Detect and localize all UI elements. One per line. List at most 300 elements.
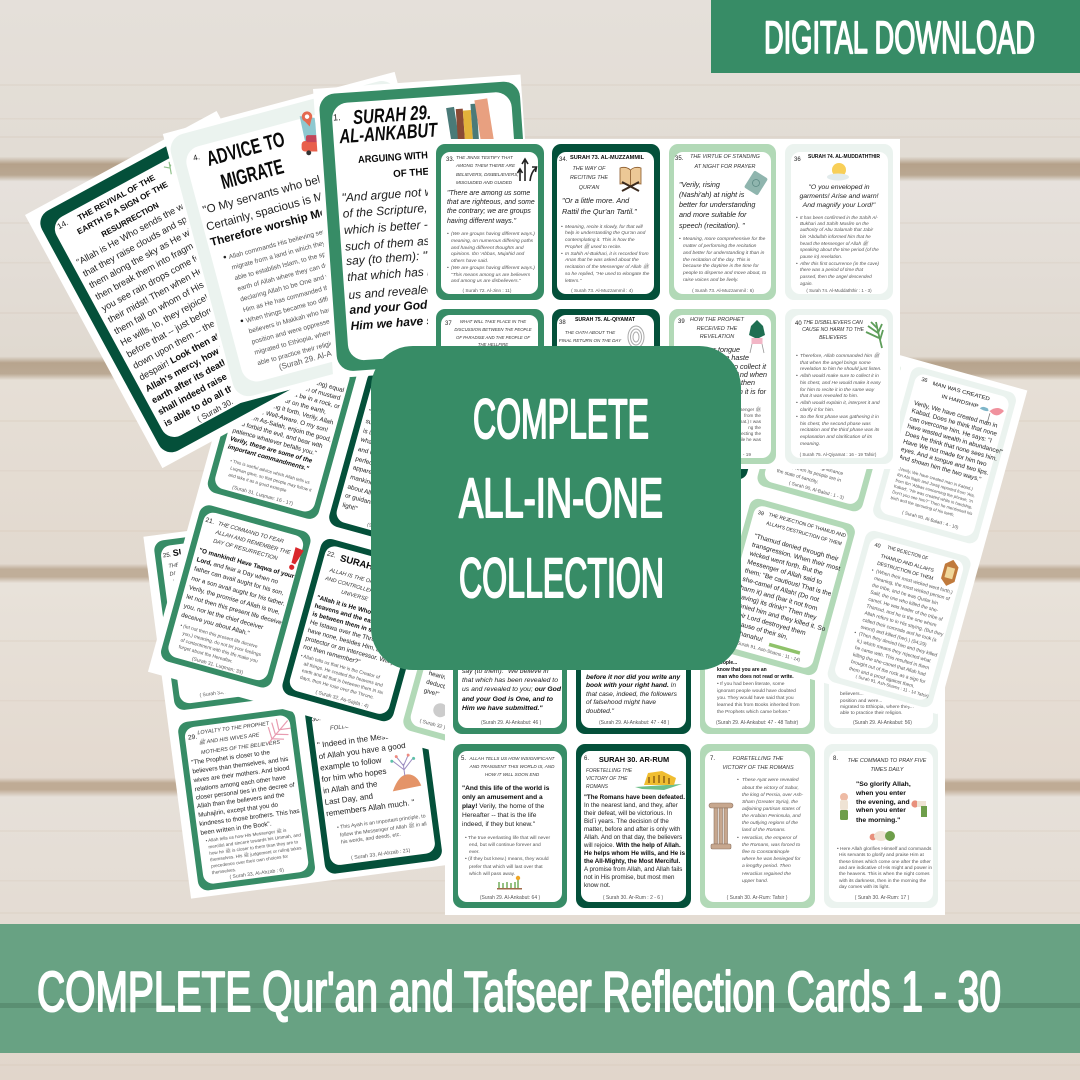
- card 38: Surah 75 Al-Qiyamat: THE OATH ABOUT THE: [565, 330, 616, 335]
- card 30: following the Messenger: in Allah and the: [323, 779, 379, 795]
- card: migrating believers: believers...: [840, 691, 864, 697]
- card 40: the disbelievers can cause no harm: •: [796, 415, 798, 420]
- card 21: the command to fear Allah: 21.: [205, 517, 215, 526]
- card 40: the rejection of Thamud Tafsir: camel. He was leader of the tribe of: [868, 596, 944, 623]
- card 36: man was created in hardship: Verily, We have created man in: [913, 400, 999, 430]
- card 30: following the Messenger: for him who hopes: [321, 767, 387, 784]
- card 7: foretelling the victory: Heraclius, the emperor of: [742, 835, 798, 841]
- card 33: the Jinns testify: meaning, on numerous differing paths: [451, 238, 534, 244]
- card 8: the command to pray: when you enter: [855, 790, 906, 797]
- card 36: Surah 74 Al-Muddaththir: garments! Arise and warn!: [799, 193, 879, 200]
- card 22: Surah 32: days, then He rose over the Throne.: [299, 675, 375, 701]
- card: dark lower: [594, 465, 741, 645]
- card 1: Surah 29 Al-Ankabut: [313, 74, 541, 378]
- card 40: the rejection of Thamud Tafsir: 40: [874, 542, 881, 550]
- card 30: following the Messenger: example to follow: [320, 756, 382, 773]
- card 40: the rejection of Thamud Tafsir: [826, 529, 973, 709]
- card: light green lower: [401, 570, 556, 759]
- card 14: the revival of the earth: EARTH IS A SIGN OF THE: [76, 180, 170, 236]
- card 20: Luqman advice: Allah will bring it forth. Verily, Allah: [241, 394, 335, 427]
- card 37: discussion between paradise and hellfire: WHAT WILL TAKE PLACE IN THE: [460, 319, 526, 324]
- card 35: Al-Balad: the state of sanctity.: [776, 468, 819, 485]
- card 40: the disbelievers can cause no harm: clarify it for him.: [800, 407, 834, 413]
- card 40: the disbelievers can cause no harm: explanation and clarification of its: [800, 434, 873, 440]
- icon: open Quran on stand: [620, 167, 641, 191]
- card 6: Surah 30 Ar-Rum: VICTORY OF THE: [586, 776, 628, 782]
- card 14: the revival of the earth: THE REVIVAL OF THE: [76, 173, 157, 223]
- card 8: the command to pray: "So glorify Allah,: [856, 781, 911, 788]
- card 40: the rejection of Thamud Tafsir: ( Surah 91. Ash-Shams : 11 - 14 Tafsir): [855, 674, 930, 699]
- card: dark upper: [640, 301, 787, 481]
- card 35: Al-Balad: sanctity when the significance: [780, 454, 844, 477]
- card 14: the revival of the earth: their midst! Then when He has made: [106, 245, 243, 325]
- card 33: the Jinns testify: ( Surah 72. Al-Jinn : 11): [463, 288, 512, 293]
- card 21: the command to fear Allah: THE COMMAND TO FEAR: [217, 521, 284, 545]
- card 40: the rejection of Thamud Tafsir: Salif, the one who killed the she-: [869, 590, 939, 614]
- card 21: the command to fear Allah: (Surah 31. Luqman: 33): [191, 656, 244, 676]
- card 36: man was created in hardship: can overcome him. He says: "I: [909, 415, 993, 445]
- card 20: Luqman advice: Luqman gave, so that people may follow it: [230, 465, 313, 493]
- card 4: advice to migrate: When things became too difficult for the: [245, 288, 359, 325]
- card 22: Surah 32: not then remember?": [302, 643, 361, 666]
- card 33: the Jinns testify: (We are groups having different ways.): [451, 265, 535, 271]
- card 33: the Jinns testify: opinions. Ibn 'Abbas, Mujahid and: [451, 251, 525, 257]
- sheet: cards 21, 22 and Luqman: [148, 318, 631, 779]
- card 36: Surah 74 Al-Muddaththir: 36: [794, 157, 801, 163]
- card 7: foretelling the victory: about the victory of Sabur,: [742, 785, 799, 791]
- card 40: the rejection of Thamud Tafsir: (Then they denied him and they killed: [858, 631, 938, 659]
- card 30: following the Messenger: 30.: [311, 715, 321, 723]
- card: dark green upper: (Surah 31. Luqman: 20): [366, 522, 419, 542]
- card 21: the command to fear Allah: [159, 503, 313, 690]
- card 20: Luqman advice: in the heavens or on the earth,: [243, 386, 327, 416]
- card 35: virtue of standing at night: •: [679, 237, 681, 242]
- card 33: the Jinns testify: THE JINNS TESTIFY THAT: [456, 155, 514, 160]
- card 40: the disbelievers can cause no harm: recitation and the third phase was its: [800, 427, 880, 433]
- card 36: man was created in hardship: [871, 365, 1019, 546]
- card 40: the rejection of Thamud Tafsir: sword) and killed (her).) (54:29): [860, 624, 928, 648]
- card 38: Surah 75 Al-Qiyamat: [552, 309, 660, 464]
- card 22: Surah 32: heavens and the earth and all that: [314, 602, 414, 637]
- card 40: the disbelievers can cause no harm: So the first phase was gathering it in: [800, 414, 879, 420]
- card 40: the rejection of Thamud Tafsir: Thamud, and he is the one whom: [866, 603, 937, 629]
- card: dark green upper: light!": [342, 502, 358, 513]
- card 20: Luqman advice: patience whatever befalls you.": [232, 427, 317, 457]
- card: dark green upper: is in the heavens and: [362, 428, 422, 450]
- card 6: Surah 30 Ar-Rum: SURAH 30. AR-RUM: [599, 755, 669, 764]
- card 40: the disbelievers can cause no harm: his chest, and He would make it easy: [800, 380, 881, 386]
- icon: green leaf: [866, 322, 883, 348]
- card 35: Al-Balad: is high, when its people are in: [778, 461, 842, 484]
- card 4: advice to migrate: declaring Allah to be One and worshipping: [240, 265, 361, 303]
- card 29: loyalty to the Prophet: Muhajirin, except that you do: [198, 801, 279, 819]
- card 7: foretelling the victory: adjoining partisan states of: [742, 806, 801, 812]
- card 21: the command to fear Allah: "O mankind! Have Taqwa of your: [198, 547, 295, 580]
- card 6: Surah 30 Ar-Rum: their defeat, will be victorious. In: [584, 810, 673, 817]
- card 14: the revival of the earth: before that -- just before it was sent: [125, 282, 257, 359]
- card 36: man was created in hardship: Don't you see him?" Then he mentioned his: [892, 489, 973, 516]
- card 1: Surah 29 Al-Ankabut: OF THE: [393, 167, 430, 180]
- card 29: loyalty to the Prophet: merciful and sincere towards his Ummah, and: [208, 832, 302, 849]
- card 39: rejection of Thamud: Messenger of Allah said to: [746, 559, 823, 586]
- card 22: Surah 32: all things. He created the heavens and: [303, 661, 384, 689]
- card 21: the command to fear Allah: • (let not then this present life deceive: [180, 623, 258, 650]
- card 30: following the Messenger: his words, and deeds, etc.: [341, 832, 401, 846]
- card 37: discussion between paradise and hellfire: THE HELLFIRE: [478, 342, 508, 347]
- card: Tafsir of 47 - 48: the Prophets which came before.": [717, 709, 790, 715]
- card 33: the Jinns testify: "There are among us some: [447, 190, 530, 197]
- card 1: Surah 29 Al-Ankabut: such of them as do wrong; and: [345, 228, 510, 254]
- card 4: advice to migrate: position and were oppressed, they: [251, 313, 350, 346]
- card 33: the Jinns testify: others have said.: [451, 258, 488, 264]
- card: Tafsir of 47 - 48: people...: [717, 660, 738, 666]
- icon: red exclamation mark: [287, 547, 304, 571]
- icon: flamingo: [977, 403, 1004, 426]
- card 40: the disbelievers can cause no harm: •: [796, 401, 798, 406]
- card 35: virtue of standing at night: because the daytime is the time for: [683, 263, 759, 269]
- card 21: the command to fear Allah: you, nor let the chief deceiver: [183, 603, 264, 631]
- card 36: man was created in hardship: have wasted wealth in abundance!": [906, 423, 1004, 456]
- card 35: virtue of standing at night: THE VIRTUE OF STANDING: [690, 154, 760, 160]
- card 30: following the Messenger: Last Day, and: [324, 792, 374, 807]
- card 6: Surah 30 Ar-Rum: ( Surah 30. Ar-Rum : 2 - 6 ): [603, 895, 663, 901]
- card 14: the revival of the earth: them along the sky as He wills, and: [87, 213, 219, 290]
- card: argue with scripture ending: say (to them): "We believe in: [462, 668, 549, 675]
- card 4: advice to migrate: migrate from a land in which they are not: [231, 234, 348, 272]
- card 40: the rejection of Thamud Tafsir: meaning, the most wicked person of: [873, 576, 951, 603]
- card 40: the rejection of Thamud Tafsir: killing the she-camel that Allah had: [852, 652, 927, 678]
- card 22: Surah 32: He Istawa over the Throne. You: [309, 619, 396, 649]
- card: neither did you read: [576, 570, 691, 734]
- card 40: the disbelievers can cause no harm: [785, 309, 893, 464]
- card 14: the revival of the earth: RESURRECTION: [100, 201, 161, 239]
- card 8: the command to pray: the heavens. This is when the night comes: [839, 871, 930, 877]
- card: Tafsir of 47 - 48: you. They would have said that you: [717, 695, 794, 701]
- card 25: [153, 526, 292, 711]
- card 39: rejection of Thamud: transgression. When their most: [751, 542, 841, 573]
- card: neither did you read: that case, indeed, the followers: [586, 691, 678, 698]
- card 6: Surah 30 Ar-Rum: He helps whom He wills, and He is: [584, 850, 686, 857]
- card 34: Surah 73 Al-Muzzammil: help in understanding the Qur'an and: [565, 230, 646, 236]
- card 1: Surah 29 Al-Ankabut: SURAH 29.: [352, 102, 432, 129]
- card: Tafsir of 47 - 48: [700, 570, 815, 734]
- card 36: Surah 74 Al-Muddaththir: •: [796, 261, 798, 266]
- card 35: virtue of standing at night: matter of performing the recitation: [683, 243, 757, 249]
- card: Tafsir of 47 - 48: learned this from Books inherited from: [717, 702, 800, 708]
- card 22: Surah 32: • Allah tells us that He is the Creator of: [300, 653, 381, 681]
- card 5: Allah tells us how insignificant: ever.: [469, 849, 480, 855]
- card 4: advice to migrate: ADVICE TO: [204, 128, 287, 171]
- card 6: Surah 30 Ar-Rum: [576, 744, 691, 908]
- card 34: Surah 73 Al-Muzzammil: THE WAY OF: [573, 166, 606, 172]
- card 22: Surah 32: SURAH 32. AS-SAJDA: [339, 553, 439, 591]
- icon: sun and cloud: [827, 163, 849, 180]
- card 30: following the Messenger: • This Ayah is an important principle, to: [337, 813, 426, 831]
- card 22: Surah 32: have none, besides Him, as a: [307, 627, 389, 656]
- card 5: Allah tells us how insignificant: • The true everlasting life that will never: [465, 835, 550, 841]
- card 30: following the Messenger: FOLLOW THE MESSENGER: [330, 716, 409, 732]
- card: migrating believers: (Surah 29. Al-Ankabut: 56): [853, 720, 912, 726]
- card 35: virtue of standing at night: raise voices and be lively.: [683, 277, 738, 283]
- card 5: Allah tells us how insignificant: • (if they but knew.) means, they would: [465, 856, 549, 862]
- card: dark green upper: and has completed His Graces: [357, 446, 442, 476]
- card 7: foretelling the victory: •: [737, 778, 739, 783]
- card 1: Surah 29 Al-Ankabut: that which has been revealed to: [347, 258, 517, 284]
- card 35: virtue of standing at night: the recitation of the day. This is: [683, 257, 751, 263]
- card 7: foretelling the victory: the king of Persia, over Ash-: [742, 792, 804, 798]
- card 34: Surah 73 Al-Muzzammil: [552, 144, 660, 300]
- card 40: the rejection of Thamud Tafsir: Allah refers to in His saying, (But they: [864, 610, 944, 638]
- card 34: Surah 73 Al-Muzzammil: recitation of the Messenger of Allah ﷺ: [565, 262, 650, 270]
- card 33: the Jinns testify: [436, 144, 544, 300]
- icon: stone pillar: [709, 803, 733, 849]
- card 40: the rejection of Thamud Tafsir: DESTRUCTION OF THEM: [876, 561, 934, 582]
- card 40: the rejection of Thamud Tafsir: THE REJECTION OF: [886, 545, 928, 562]
- card 29: loyalty to the Prophet: [177, 708, 316, 892]
- card: Tafsir of 47 - 48: (Surah 29. Al-Ankabut: 47 - 48 Tafsir): [716, 720, 799, 726]
- card 38: Surah 75 Al-Qiyamat: SURAH 75. AL-QIYAMAT: [575, 317, 636, 323]
- card 1: Surah 29 Al-Ankabut: 1.: [333, 112, 341, 123]
- card 34: Surah 73 Al-Muzzammil: QUR'AN: [579, 185, 599, 191]
- card 39: how the Prophet received the revelation: therewith. It is for Us to collect it: [665, 362, 767, 371]
- card 7: foretelling the victory: the Romans, was forced to: [742, 842, 800, 848]
- card 34: Surah 73 Al-Muzzammil: In Sahih Al-Bukhari, it is recorded from: [565, 251, 649, 257]
- card 5: Allah tells us how insignificant: "And this life of the world is: [462, 785, 550, 792]
- card 40: the disbelievers can cause no harm: that it was revealed to him.: [800, 393, 858, 399]
- card 30: following the Messenger: [304, 691, 443, 875]
- card 37: discussion between paradise and hellfire: DISCUSSION BETWEEN THE PEOPLE: [454, 327, 532, 332]
- card 40: the disbelievers can cause no harm: •: [796, 374, 798, 379]
- card 6: Surah 30 Ar-Rum: In the nearest land, and they, after: [584, 802, 678, 809]
- card 1: Surah 29 Al-Ankabut: and your God is One, and to: [349, 292, 510, 317]
- card 7: foretelling the victory: Heraclius regained the: [742, 871, 791, 877]
- card 7: foretelling the victory: These Ayat were revealed: [742, 777, 799, 783]
- card 1: Surah 29 Al-Ankabut: say (to them): "We believe in: [346, 243, 499, 268]
- sheet: rotated page with cards 36, 39 and 40: [468, 260, 1027, 714]
- card 36: Surah 74 Al-Muddaththir: heard the Messenger of Allah ﷺ: [800, 240, 869, 246]
- card 8: the command to pray: [824, 744, 938, 908]
- card 8: the command to pray: 8.: [833, 756, 838, 762]
- card 8: the command to pray: with its darkness, then in the morning the: [839, 878, 927, 884]
- card 4: advice to migrate: [163, 72, 467, 404]
- card: neither did you read: book with your right hand. In: [586, 682, 676, 689]
- heading: complete: COMPLETE: [473, 387, 649, 450]
- icon: car with map pin: [292, 108, 333, 161]
- card 20: Luqman advice: seed, and though it be in a rock, or: [245, 378, 340, 411]
- card: light green lower: hearing and: [428, 670, 462, 686]
- card: argue with scripture ending: (Surah 29. Al-Ankabut: 46 ): [481, 720, 542, 726]
- card 39: rejection of Thamud: THE REJECTION OF THAMUD AND: [768, 512, 847, 539]
- icon: potted plant: [749, 320, 765, 353]
- card 8: the command to pray: ( Surah 30. Ar-Rum: 17 ): [855, 895, 910, 901]
- card 30: following the Messenger: ( Surah 33, Al-Ahzab : 21): [351, 848, 411, 861]
- card 36: man was created in hardship: Ibn Abi Najih and Juraij reported from 'Ata,: [897, 472, 976, 498]
- card 36: man was created in hardship: (Verily, We have created man in Kabad.): [898, 466, 974, 492]
- card 4: advice to migrate: Therefore worship Me.": [209, 204, 336, 249]
- card 29: loyalty to the Prophet: Allah than the believers and the: [197, 792, 285, 810]
- card: migrating believers: able to practice their religion.: [840, 710, 903, 716]
- card 34: Surah 73 Al-Muzzammil: 34.: [559, 157, 568, 163]
- card 39: how the Prophet received the revelation: We have recited it to you, then: [658, 378, 755, 387]
- card 22: Surah 32: protector or an intercessor. Will you: [305, 635, 402, 668]
- card 35: virtue of standing at night: "Verily, rising: [679, 180, 720, 189]
- card 36: man was created in hardship: Kabad. Does he think that none: [911, 407, 998, 438]
- card 36: man was created in hardship: 36: [921, 377, 928, 384]
- card 40: the disbelievers can cause no harm: Allah would explain it, interpret it and: [799, 400, 880, 406]
- card 38: Surah 75 Al-Qiyamat: FINAL RETURN ON THE DAY: [559, 338, 622, 343]
- card 34: Surah 73 Al-Muzzammil: so he replied, "He used to elongate the: [565, 271, 650, 277]
- card 22: Surah 32: [280, 537, 442, 726]
- card 29: loyalty to the Prophet: MOTHERS OF THE BELIEVERS: [201, 740, 281, 756]
- card 7: foretelling the victory: a lengthy period. Then: [742, 863, 791, 869]
- card 40: the rejection of Thamud Tafsir: •: [853, 631, 857, 636]
- card 40: the rejection of Thamud Tafsir: it,) which means they rejected what: [856, 638, 932, 664]
- card 21: the command to fear Allah: ALLAH AND REMEMBER THE: [214, 530, 291, 556]
- card 36: man was created in hardship: Have We not made for him two: [902, 438, 988, 468]
- card 36: man was created in hardship: from Ibn 'Abbas concerning the phrase, 'in: [895, 478, 974, 504]
- card 4: advice to migrate: "O My servants who believe!: [202, 168, 345, 217]
- card 40: the rejection of Thamud Tafsir: called their comrade and he took (a: [862, 617, 938, 644]
- card 29: loyalty to the Prophet: wives are their mothers. And blood: [192, 765, 290, 784]
- card 1: Surah 29 Al-Ankabut: us and revealed to you; our God: [348, 276, 520, 302]
- card 29: loyalty to the Prophet: precedence over their own choices for: [211, 854, 289, 869]
- card 40: the rejection of Thamud Tafsir: •: [871, 568, 874, 574]
- card 33: the Jinns testify: •: [447, 266, 449, 271]
- card: light green lower: give!": [423, 687, 440, 698]
- card 39: how the Prophet received the revelation: [627, 309, 776, 464]
- card 5: Allah tells us how insignificant: play! Verily, the home of the: [462, 803, 544, 810]
- card 5: Allah tells us how insignificant: HOW IT WILL SOON END: [485, 772, 540, 777]
- card 5: Allah tells us how insignificant: only an amusement and a: [462, 794, 543, 801]
- card: dark green upper: whatsoever is in the earth,: [359, 436, 433, 463]
- card 33: the Jinns testify: "This means among us are believers: [451, 272, 531, 278]
- card 14: the revival of the earth: 14.: [56, 218, 70, 231]
- card 6: Surah 30 Ar-Rum: 6.: [584, 756, 589, 762]
- card 36: Surah 74 Al-Muddaththir: again.: [800, 281, 813, 286]
- card 35: virtue of standing at night: and more suitable for: [679, 210, 747, 219]
- card 20: Luqman advice: "O my son! If it be (anything) equal: [250, 362, 345, 394]
- card 6: Surah 30 Ar-Rum: matter, before and after is only with: [584, 826, 681, 833]
- card: migrating believers: migrated to Ethiopia, where they...: [840, 704, 914, 710]
- card 36: man was created in hardship: MAN WAS CREATED: [932, 381, 991, 403]
- card 35: Al-Balad: ( Surah 90, Al-Balad : 1 - 3): [788, 480, 845, 500]
- card 35: Al-Balad: [755, 333, 902, 513]
- card 33: the Jinns testify: 33.: [446, 157, 455, 163]
- card 7: foretelling the victory: the Arabian Peninsula, and: [742, 813, 801, 819]
- card 22: Surah 32: 22.: [326, 550, 337, 560]
- card 40: the rejection of Thamud Tafsir: he came with. This resulted in them: [854, 645, 930, 671]
- card 36: Surah 74 Al-Muddaththir: •: [796, 215, 798, 220]
- card 6: Surah 30 Ar-Rum: not in His promise, but most men: [584, 874, 675, 881]
- card 6: Surah 30 Ar-Rum: Allah. And on that day, the believers: [584, 834, 682, 841]
- card 22: Surah 32: ALLAH IS THE ORGANIZER: [328, 567, 397, 592]
- card 5: Allah tells us how insignificant: ALLAH TELLS US HOW INSIGNIFICANT: [468, 756, 556, 761]
- card 5: Allah tells us how insignificant: AND TRANSIENT THIS WORLD IS, AND: [469, 764, 555, 769]
- card 25: THE: [168, 562, 180, 570]
- card 20: Luqman advice: and forbid the evil, and bear with: [234, 419, 324, 450]
- card 14: the revival of the earth: then break them into fragments, until: [94, 222, 229, 302]
- card 14: the revival of the earth: shall indeed raise the dead, and He: [156, 335, 295, 417]
- card 39: rejection of Thamud: [710, 497, 857, 677]
- card 40: the disbelievers can cause no harm: CAUSE NO HARM TO THE: [802, 327, 865, 333]
- card: dark green upper: mankind is he who disputes: [349, 474, 426, 501]
- panel: complete all-in-one collection: [371, 346, 741, 670]
- card 6: Surah 30 Ar-Rum: will rejoice. With the help of Allah.: [584, 842, 681, 849]
- card 4: advice to migrate: Certainly, spacious is My earth.: [205, 181, 362, 234]
- heading: all-in-one: ALL-IN-ONE: [459, 466, 663, 529]
- card 40: the disbelievers can cause no harm: 40: [795, 321, 802, 327]
- card 1: Surah 29 Al-Ankabut: which is better -- except with: [343, 213, 496, 237]
- card 36: Surah 74 Al-Muddaththir: authority of Abu Salamah that Jabir: [800, 227, 873, 232]
- card 35: virtue of standing at night: speech (recitation). ": [679, 221, 745, 230]
- card 7: foretelling the victory: FORETELLING THE: [733, 756, 784, 762]
- card 14: the revival of the earth: despair! Look then at the effects of: [137, 302, 274, 382]
- card 25: SURAH: [172, 544, 205, 558]
- card 36: man was created in hardship: birth and the sprouting of his teeth.: [890, 495, 955, 517]
- card 29: loyalty to the Prophet: 29.: [188, 734, 198, 742]
- card 40: the rejection of Thamud Tafsir: the tribe, and he was Qudar bin: [871, 583, 939, 607]
- icon: teal book: [744, 170, 768, 196]
- card 40: the rejection of Thamud Tafsir: THAMUD AND ALLAH'S: [880, 553, 935, 574]
- card: dark green upper: perfectly upon you,: [354, 456, 408, 477]
- icon: arrows pointing up: [518, 159, 536, 181]
- card 40: the rejection of Thamud Tafsir: (When their most wicked went forth,): [875, 569, 954, 596]
- card 39: how the Prophet received the revelation: REVELATION: [700, 334, 734, 340]
- card 4: advice to migrate: migrated to Ethiopia, where they were: [254, 321, 363, 357]
- card 40: the rejection of Thamud Tafsir: them and a proof against them.: [848, 666, 915, 690]
- card 14: the revival of the earth: is able to do all things.: [162, 372, 254, 428]
- card 40: the disbelievers can cause no harm: that when the angel brings some: [800, 360, 871, 366]
- card: Tafsir of 47 - 48: ignorant people would have doubted: [717, 688, 796, 694]
- card 39: how the Prophet received the revelation: RECEIVED THE: [697, 326, 738, 332]
- card: argue with scripture ending: that which has been revealed to: [462, 677, 558, 684]
- card 36: man was created in hardship: ( Surah 90. Al-Balad : 4 - 10): [902, 510, 960, 530]
- card: argue with scripture ending: Him we have submitted.": [462, 705, 543, 712]
- card 1: Surah 29 Al-Ankabut: Him we have submitted.": [350, 309, 493, 333]
- card 14: the revival of the earth: you see rain drops come forth from: [100, 236, 230, 313]
- card 25: FC: [172, 578, 180, 585]
- card 36: Surah 74 Al-Muddaththir: "O you enveloped in: [809, 184, 870, 191]
- card 25: DIS: [169, 570, 179, 578]
- card 6: Surah 30 Ar-Rum: A promise from Allah, and Allah fails: [584, 866, 682, 873]
- card 5: Allah tells us how insignificant: Hereafter -- that is the life: [462, 812, 537, 819]
- card 34: Surah 73 Al-Muzzammil: RECITING THE: [570, 175, 608, 181]
- card 39: rejection of Thamud: their Lord destroyed them: [732, 610, 807, 637]
- card 21: the command to fear Allah: Lord, and fear a Day when no: [196, 556, 279, 586]
- card 34: Surah 73 Al-Muzzammil: Anas that he was asked about the: [564, 257, 639, 263]
- card 39: how the Prophet received the revelation: - 19: [743, 452, 751, 457]
- card 36: man was created in hardship: And shown him the two ways.": [898, 454, 982, 483]
- card 20: Luqman advice: important commandments.": [227, 444, 311, 473]
- card 14: the revival of the earth: Allah's mercy, how He revives the: [144, 315, 278, 394]
- card 8: the command to pray: • Here Allah glorifies Himself and commands: [837, 846, 932, 852]
- card 29: loyalty to the Prophet: kindness to those brothers. This has: [199, 808, 300, 828]
- card 14: the revival of the earth: ( Surah 30. Ar-Rum : 48 - 50): [196, 367, 291, 424]
- icon: colosseum: [635, 771, 682, 790]
- card 33: the Jinns testify: BELIEVERS, DISBELIEVERS,: [456, 172, 519, 177]
- card 5: Allah tells us how insignificant: which will pass away.: [469, 871, 515, 877]
- card 21: the command to fear Allah: Verily, the promise of Allah is true,: [188, 584, 281, 616]
- card: Tafsir of 47 - 48: know that you are an: [717, 667, 767, 673]
- card 39: how the Prophet received the revelation: from the: [744, 413, 761, 418]
- card 39: rejection of Thamud: ALLAH'S DESTRUCTION OF THEM: [765, 521, 842, 547]
- card 20: Luqman advice: and take it as a good example: [228, 472, 288, 493]
- card: dark green upper: subjected for you whatsoever: [365, 418, 446, 447]
- card 7: foretelling the victory: ( Surah 30. Ar-Rum: Tafsir ): [727, 895, 788, 901]
- card 39: rejection of Thamud: denied him and they killed it. So: [734, 602, 826, 633]
- card 8: the command to pray: and are indicative of His might and power in: [839, 865, 932, 871]
- card 39: rejection of Thamud: 39: [757, 510, 765, 517]
